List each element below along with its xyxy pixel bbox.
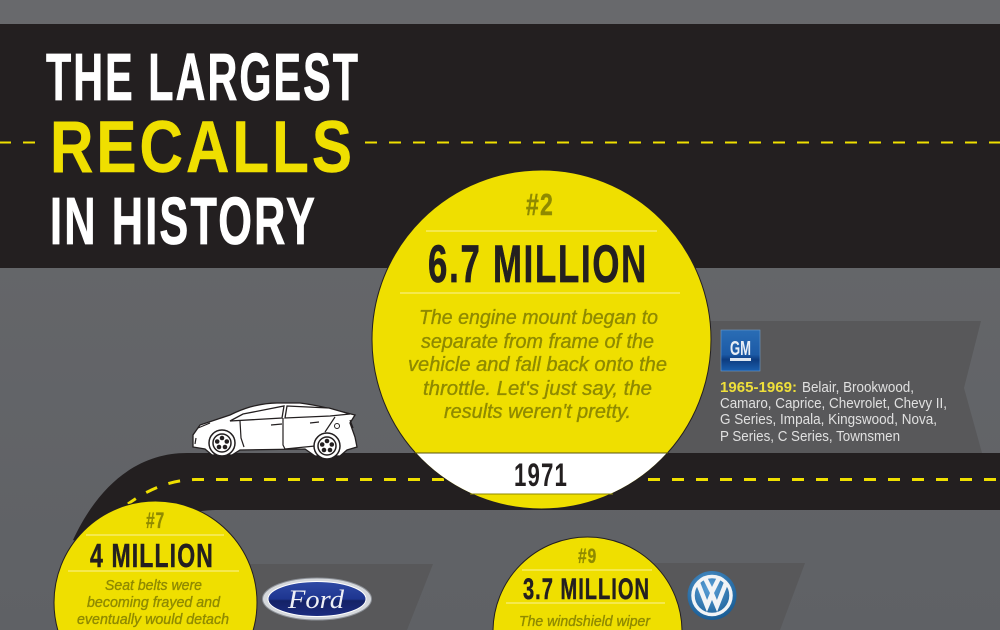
rank: #7 bbox=[146, 508, 165, 533]
circle: #9 recall bbox=[493, 537, 682, 630]
title bbox=[46, 40, 360, 259]
circle: #2 recall bbox=[372, 170, 712, 509]
description bbox=[408, 307, 667, 423]
icon: Ford logo: Ford bbox=[287, 585, 345, 614]
ribbon: Ford models bbox=[230, 564, 433, 630]
GM model list: Camaro, Caprice, Chevrolet, Chevy II, bbox=[720, 396, 947, 412]
recall count: 4 MILLION bbox=[90, 537, 214, 574]
GM model list bbox=[720, 380, 947, 445]
description bbox=[77, 577, 229, 628]
header band bbox=[0, 24, 1000, 268]
description: becoming frayed and bbox=[87, 594, 221, 611]
description: results weren't pretty. bbox=[444, 401, 631, 423]
ribbon: GM models bbox=[665, 321, 982, 453]
icon: GM logo: GM bbox=[730, 338, 751, 360]
recall count: 6.7 MILLION bbox=[428, 235, 648, 294]
circle: #7 recall bbox=[54, 501, 257, 630]
description: vehicle and fall back onto the bbox=[408, 354, 667, 376]
ribbon: VW models bbox=[640, 563, 805, 630]
description: Seat belts were bbox=[105, 577, 202, 594]
description: The windshield wiper bbox=[519, 613, 651, 630]
description: separate from frame of the bbox=[421, 331, 654, 353]
description: eventually would detach bbox=[77, 611, 229, 628]
rank: #2 bbox=[526, 187, 554, 222]
GM model list: P Series, C Series, Townsmen bbox=[720, 429, 900, 445]
recall count: 3.7 MILLION bbox=[523, 573, 650, 606]
road bbox=[73, 453, 1000, 560]
rank: #9 bbox=[578, 545, 597, 568]
year band: 1971 bbox=[514, 457, 568, 493]
title: THE LARGEST bbox=[46, 40, 360, 115]
GM model list: G Series, Impala, Kingswood, Nova, bbox=[720, 412, 937, 428]
road centre dashes bbox=[128, 480, 1000, 504]
GM model list: Belair, Brookwood, bbox=[802, 380, 914, 396]
title: RECALLS bbox=[50, 107, 355, 188]
icon: GM logo bbox=[721, 330, 760, 371]
icon: Ford logo bbox=[262, 578, 372, 620]
title: IN HISTORY bbox=[50, 184, 317, 259]
description: throttle. Let's just say, the bbox=[423, 378, 652, 400]
icon: VW logo bbox=[688, 571, 736, 620]
icon: car bbox=[193, 403, 357, 459]
header dashed road line bbox=[0, 142, 1000, 144]
description: The engine mount began to bbox=[419, 307, 658, 329]
GM model list: 1965-1969: bbox=[720, 380, 797, 396]
year band bbox=[415, 452, 668, 494]
